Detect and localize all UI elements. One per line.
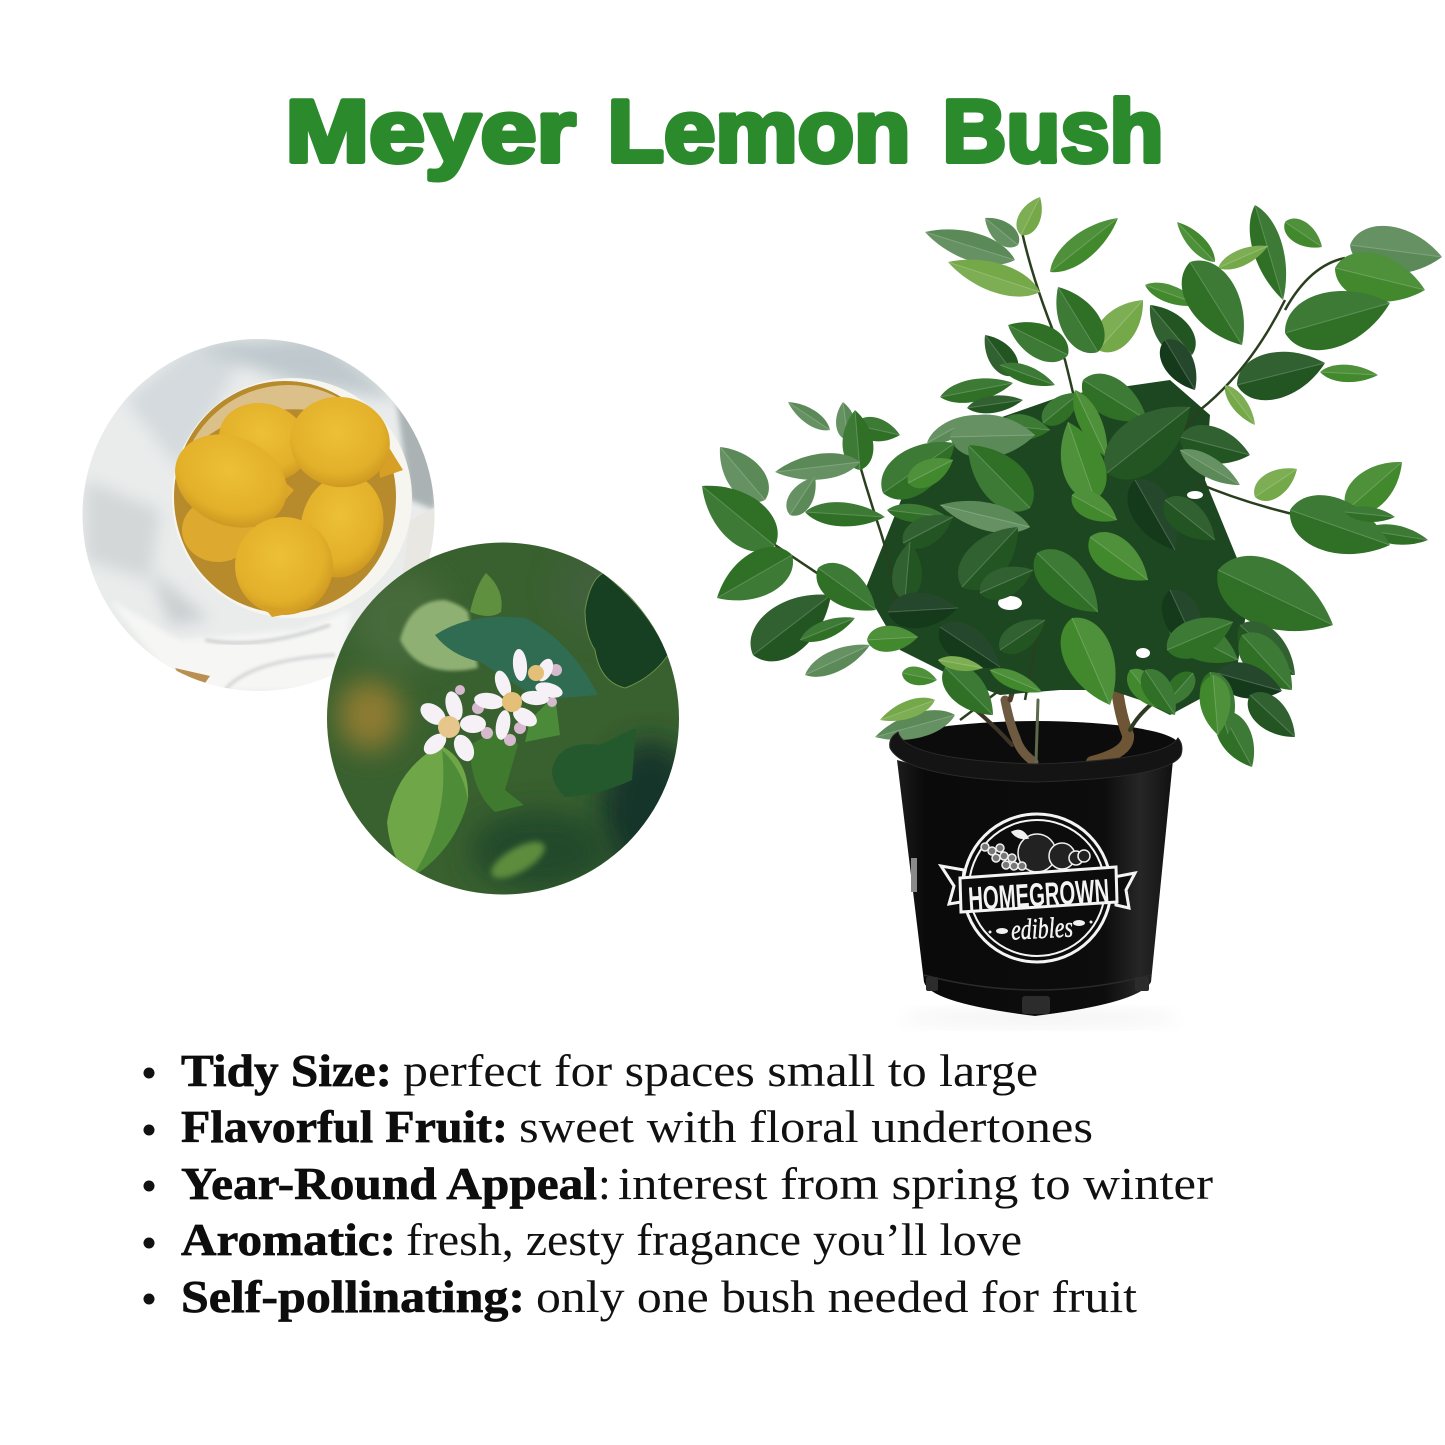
- bullet: aromatic: [144, 1214, 1022, 1265]
- pot interior: [893, 721, 1179, 769]
- bullet: self-pollinating: only one bush needed for fruit: [536, 1271, 1137, 1322]
- leaves back: [872, 192, 1445, 775]
- plant in pot: [687, 192, 1445, 1016]
- bullet: self-pollinating: Self-pollinating:: [181, 1271, 525, 1322]
- leaves centre front: [1022, 364, 1240, 736]
- bullet: self-pollinating: [144, 1271, 1137, 1322]
- blurred background: [338, 545, 700, 890]
- bullet: flavorful fruit: sweet with floral undertones: [519, 1101, 1093, 1152]
- title: [286, 82, 1164, 180]
- gaps between leaves: [998, 491, 1203, 658]
- bullet: year-round appeal: Year-Round Appeal: [181, 1158, 597, 1209]
- pot side label: [911, 858, 917, 892]
- feature list: [144, 1045, 1213, 1322]
- pot foot notches: [926, 977, 1149, 1014]
- bullet: flavorful fruit: Flavorful Fruit:: [181, 1101, 508, 1152]
- bullet: flavorful fruit: [144, 1101, 1093, 1152]
- cloth folds: [85, 335, 440, 690]
- stems: [775, 232, 1345, 720]
- logo fruit: [981, 830, 1090, 872]
- bullet: tidy size: [144, 1045, 1038, 1096]
- pot foot band: [924, 975, 1151, 990]
- title: Meyer: [286, 82, 576, 180]
- bullet: tidy size: perfect for spaces small to large: [403, 1045, 1038, 1096]
- logo script: edibles: [1010, 911, 1074, 947]
- bullet: year-round appeal: interest from spring to winter: [618, 1158, 1213, 1209]
- title: Lemon: [608, 82, 910, 180]
- bowl: [172, 378, 412, 618]
- bullet: year-round appeal: :: [598, 1158, 611, 1209]
- bullet: year-round appeal: [144, 1158, 1213, 1209]
- leaves: [387, 573, 668, 877]
- photo: bowl of lemons: [80, 335, 440, 695]
- bullet: aromatic: fresh, zesty fragance you’ll love: [406, 1214, 1022, 1265]
- trunks: [950, 600, 1170, 762]
- bullet: aromatic: Aromatic:: [181, 1214, 396, 1265]
- bullet: tidy size: Tidy Size:: [181, 1045, 392, 1096]
- leaves left cluster: [687, 396, 1053, 727]
- buds: [455, 664, 562, 746]
- blossoms: [416, 648, 564, 764]
- logo wordmark: HOMEGROWN: [967, 872, 1110, 917]
- lemons: [160, 389, 403, 617]
- title: Bush: [942, 82, 1164, 180]
- pot shadow: [900, 1010, 1180, 1026]
- pot body: [897, 760, 1173, 1016]
- pot logo: Homegrown edibles: [941, 814, 1135, 962]
- logo ribbon: [941, 866, 964, 904]
- pot rim: [890, 732, 1182, 782]
- photo: lemon blossoms: [320, 540, 700, 900]
- foliage mass: [865, 380, 1250, 715]
